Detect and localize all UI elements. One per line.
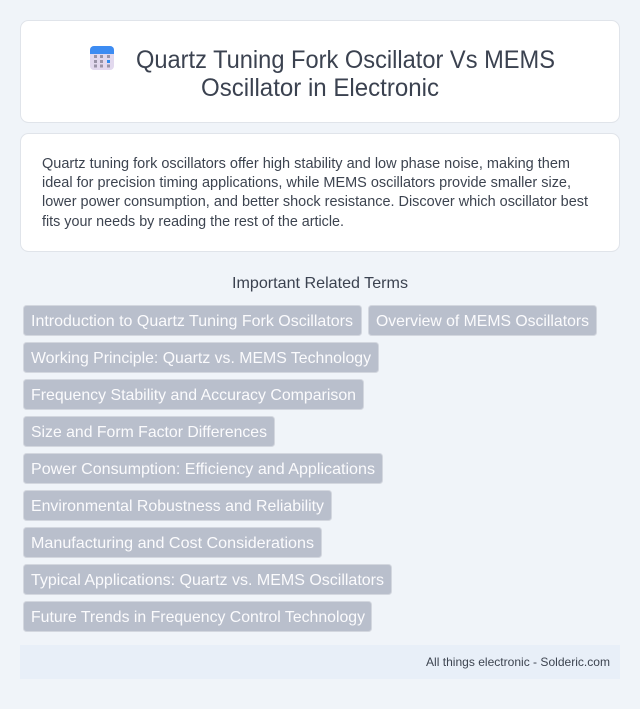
footer text: All things electronic - Solderic.com [426,655,610,669]
heading: important related terms: Important Related Terms [232,275,408,292]
chip 10 [24,602,372,632]
chip 7: Environmental Robustness and Reliability [31,498,324,515]
chip 6: Power Consumption: Efficiency and Applications [31,461,375,478]
text block: intro: ideal for precision timing applications, while MEMS oscillators provide smaller size, [42,175,571,191]
chip 4: Frequency Stability and Accuracy Comparison [31,387,356,404]
text block: intro: fits your needs by reading the rest of the article. [42,214,344,230]
chip 2: Overview of MEMS Oscillators [376,313,589,330]
icon: calendar [90,46,114,70]
chip 2 [368,306,596,336]
text block: intro: lower power consumption, and better shock resistance. Discover which oscillator best [42,194,588,210]
chip 1 [24,306,362,336]
chip 6 [24,454,382,484]
chip 3: Working Principle: Quartz vs. MEMS Technology [31,350,371,367]
chip 8 [24,528,322,558]
chip 10: Future Trends in Frequency Control Technology [31,609,365,626]
header card [20,20,620,122]
text block: intro [42,156,588,230]
chip 5 [24,416,274,446]
related terms chips [24,306,596,632]
chip 9 [24,564,392,594]
chip 3 [24,342,378,372]
panel: intro text [20,134,620,252]
chip 7 [24,490,332,520]
chip 1: Introduction to Quartz Tuning Fork Oscillators [31,313,353,330]
title [136,46,555,102]
chip 8: Manufacturing and Cost Considerations [31,535,314,552]
text block: intro: Quartz tuning fork oscillators offer high stability and low phase noise, making them [42,156,570,172]
chip 5: Size and Form Factor Differences [31,424,267,441]
chip 9: Typical Applications: Quartz vs. MEMS Oscillators [31,572,384,589]
footer bar [20,645,620,679]
title: Oscillator in Electronic [201,74,439,102]
chip 4 [24,380,364,410]
title: Quartz Tuning Fork Oscillator Vs MEMS [136,46,555,74]
